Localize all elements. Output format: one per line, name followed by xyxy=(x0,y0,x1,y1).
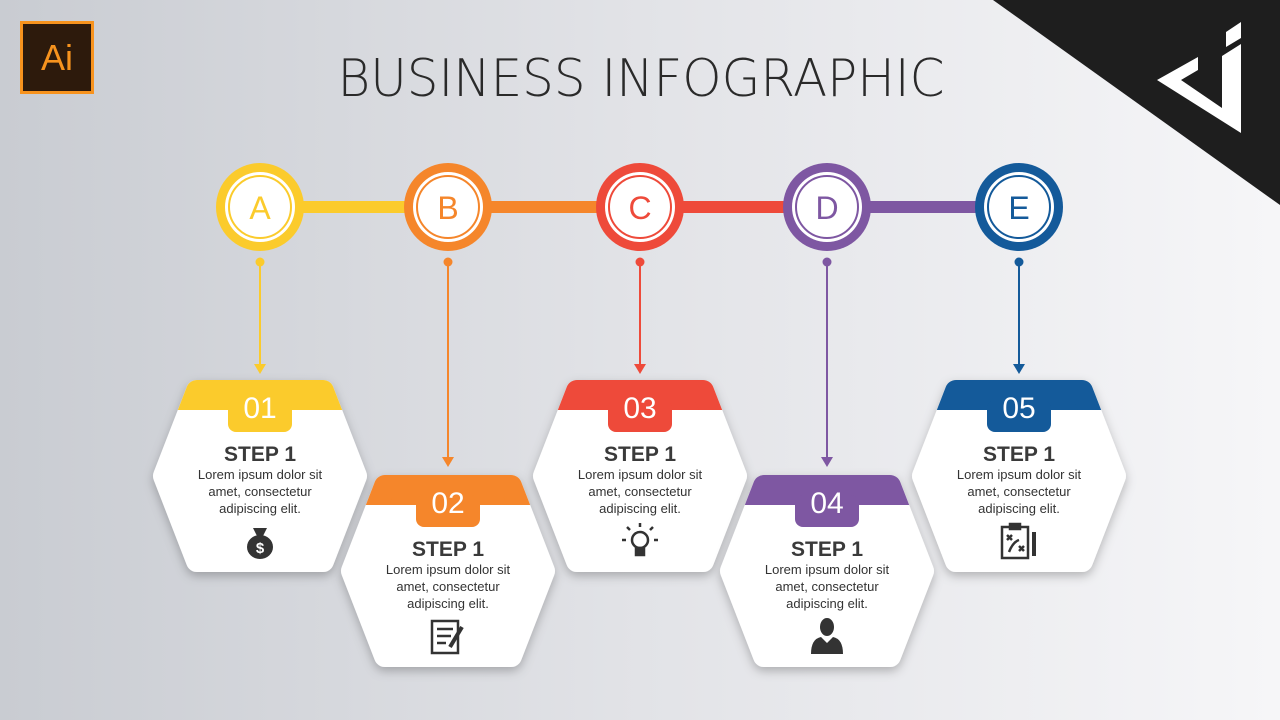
card 03: 03 xyxy=(623,392,657,425)
card 02: amet, consectetur xyxy=(396,579,500,594)
card 01: adipiscing elit. xyxy=(219,501,301,516)
card 03: STEP 1 xyxy=(604,443,676,466)
card 01: amet, consectetur xyxy=(208,484,312,499)
card 02: STEP 1 xyxy=(412,538,484,561)
card 05: 05 xyxy=(1002,392,1036,425)
arrow B xyxy=(442,258,454,467)
tab 04 xyxy=(744,475,910,527)
title: BUSINESS INFOGRAPHIC xyxy=(338,49,944,109)
card 03: adipiscing elit. xyxy=(599,501,681,516)
Ai logo xyxy=(22,22,92,92)
arrow A xyxy=(254,258,266,374)
tab 05 xyxy=(936,380,1102,432)
card 05: STEP 1 xyxy=(983,443,1055,466)
card 03 xyxy=(544,391,736,561)
tab 03 xyxy=(558,380,722,432)
circle B: B xyxy=(437,190,459,226)
arrow D xyxy=(821,258,833,467)
circle E: E xyxy=(1008,190,1030,226)
card 05: amet, consectetur xyxy=(967,484,1071,499)
corner black triangle with logo xyxy=(993,0,1280,205)
card 02: adipiscing elit. xyxy=(407,596,489,611)
card 05: Lorem ipsum dolor sit xyxy=(957,467,1082,482)
card 04: Lorem ipsum dolor sit xyxy=(765,562,890,577)
icon: clipboard plan xyxy=(1002,524,1034,558)
card 05: adipiscing elit. xyxy=(978,501,1060,516)
circle D xyxy=(783,163,871,251)
circle C: C xyxy=(628,190,652,226)
timeline connectors xyxy=(260,201,1019,213)
tab 02 xyxy=(366,475,530,527)
circle C xyxy=(596,163,684,251)
arrow C xyxy=(634,258,646,374)
tab 01 xyxy=(178,380,342,432)
circle B xyxy=(404,163,492,251)
icon: money bag xyxy=(247,528,273,559)
card 02 xyxy=(352,486,544,656)
circle D: D xyxy=(815,190,839,226)
arrow E xyxy=(1013,258,1025,374)
icon: money bag: $ xyxy=(256,540,265,557)
card 02: 02 xyxy=(431,487,465,520)
card 04: amet, consectetur xyxy=(775,579,879,594)
card 02: Lorem ipsum dolor sit xyxy=(386,562,511,577)
icon: person xyxy=(811,618,843,654)
card 01: Lorem ipsum dolor sit xyxy=(198,467,323,482)
circle A: A xyxy=(249,190,271,226)
card 04: STEP 1 xyxy=(791,538,863,561)
icon: light bulb xyxy=(622,523,658,555)
card 01: 01 xyxy=(243,392,277,425)
card 01: STEP 1 xyxy=(224,443,296,466)
icon: document with pen xyxy=(432,621,462,653)
circle A xyxy=(216,163,304,251)
Ai logo: Ai xyxy=(41,37,73,78)
card 03: Lorem ipsum dolor sit xyxy=(578,467,703,482)
card 05 xyxy=(923,391,1115,561)
card 04: 04 xyxy=(810,487,844,520)
card 04: adipiscing elit. xyxy=(786,596,868,611)
card 04 xyxy=(731,486,923,656)
card 01 xyxy=(164,391,356,561)
card 03: amet, consectetur xyxy=(588,484,692,499)
circle E xyxy=(975,163,1063,251)
